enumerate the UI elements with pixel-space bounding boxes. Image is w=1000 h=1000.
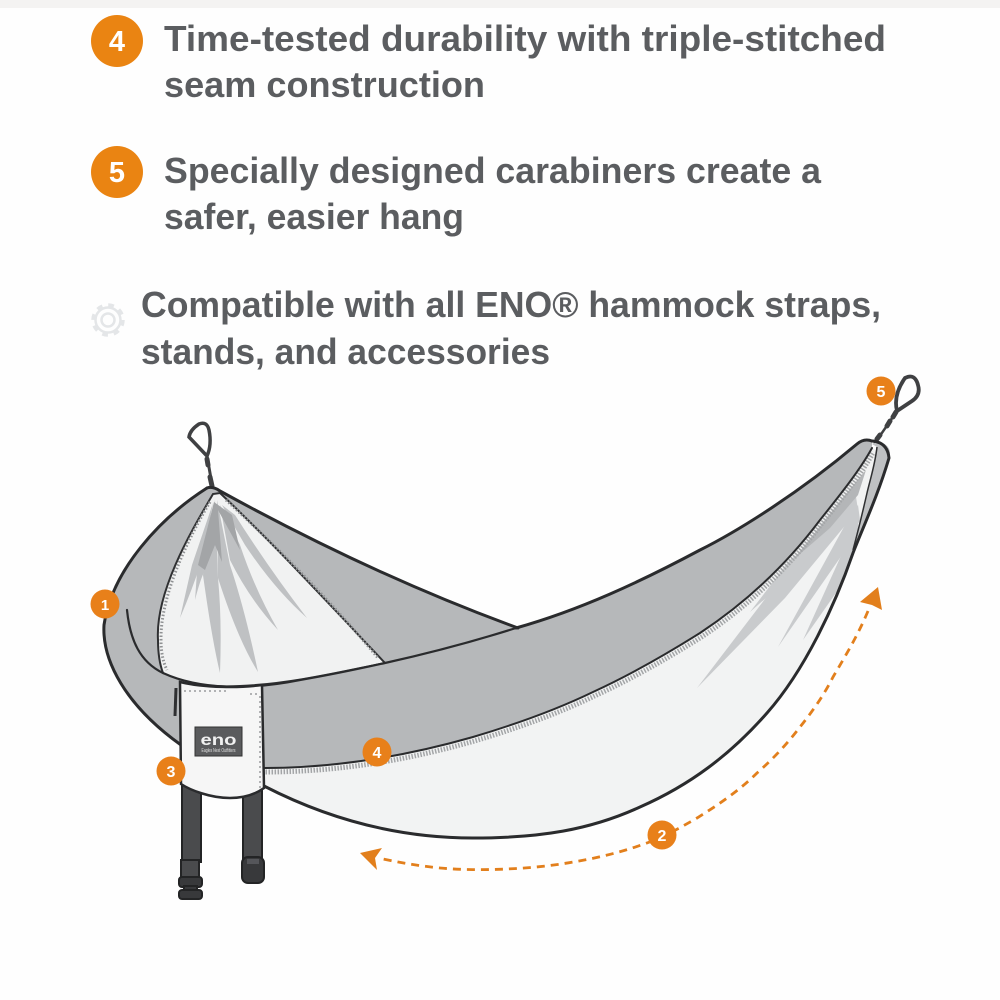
compatibility note xyxy=(93,284,881,372)
left strap xyxy=(179,780,202,899)
pouch logo tag xyxy=(195,727,242,756)
feature 5 text xyxy=(164,150,822,237)
right strap xyxy=(242,790,264,883)
compatibility text: Compatible with all ENO® hammock straps, xyxy=(141,284,881,325)
marker 5: 5 xyxy=(877,384,886,401)
feature 5 text: safer, easier hang xyxy=(164,196,464,237)
marker 5 xyxy=(866,376,896,406)
feature 5 text: Specially designed carabiners create a xyxy=(164,150,822,191)
inner stitching xyxy=(161,500,378,670)
marker 1 xyxy=(90,590,120,618)
pouch logo tag: eno xyxy=(200,732,237,749)
left carabiner xyxy=(189,423,213,490)
feature 5: carabiners xyxy=(91,146,822,237)
right carabiner xyxy=(875,377,919,443)
right panel gathers xyxy=(697,470,866,688)
feature 4: durability xyxy=(91,15,886,105)
feature 4 text: Time-tested durability with triple-stitched xyxy=(164,18,886,59)
back gray panel xyxy=(104,487,520,770)
seam stitching xyxy=(266,452,874,772)
icon: gear xyxy=(93,305,123,335)
feature 4 text: seam construction xyxy=(164,64,485,105)
pouch logo tag: Eagles Nest Outfitters xyxy=(202,748,236,754)
marker 2 xyxy=(648,820,676,850)
badge 5 xyxy=(91,146,143,198)
front gray band xyxy=(163,440,872,768)
marker 1: 1 xyxy=(101,597,109,614)
badge 5: 5 xyxy=(109,157,125,189)
hammock outlines xyxy=(104,440,889,838)
hammock illustration xyxy=(90,376,919,899)
right gray corner xyxy=(853,442,890,553)
inner white panel xyxy=(158,493,385,686)
badge 4: 4 xyxy=(109,26,125,58)
feature 4 text xyxy=(164,18,886,105)
marker 3 xyxy=(156,756,186,786)
compatibility text xyxy=(141,284,881,372)
inner panel gathers xyxy=(180,500,307,673)
badge 4 xyxy=(91,15,143,67)
marker 4 xyxy=(362,738,392,766)
marker 3: 3 xyxy=(167,764,176,781)
white bottom panel xyxy=(264,448,889,838)
compatibility text: stands, and accessories xyxy=(141,331,550,372)
marker 4: 4 xyxy=(373,745,382,762)
marker 2: 2 xyxy=(658,828,667,845)
dashed length arrow xyxy=(360,587,882,870)
right corner inner line xyxy=(853,447,877,550)
stuff sack pouch xyxy=(175,682,264,798)
